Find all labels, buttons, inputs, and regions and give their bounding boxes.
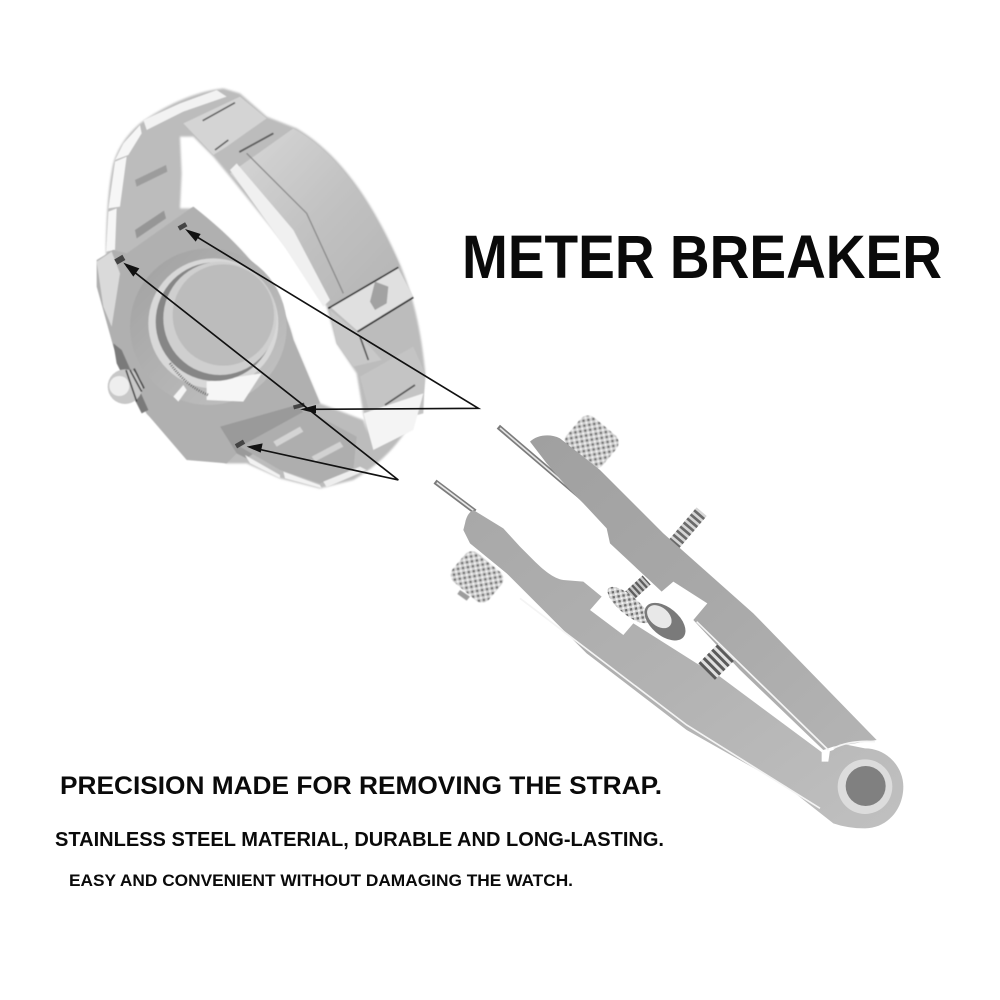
callout arrows	[123, 229, 478, 480]
lower knob	[447, 547, 507, 607]
upper arm	[530, 435, 877, 750]
feature line 2: STAINLESS STEEL MATERIAL, DURABLE AND LONG-LASTING.	[55, 829, 664, 851]
lug holes	[114, 222, 305, 448]
arm highlights	[520, 598, 875, 808]
title: METER BREAKER	[462, 223, 942, 291]
lower bracelet links	[240, 410, 357, 483]
watch case	[97, 207, 367, 488]
bracelet hole	[180, 137, 368, 433]
upper screw	[674, 512, 702, 544]
spring	[707, 652, 727, 672]
spring bar tool	[435, 411, 903, 828]
centre screw and wheel	[602, 580, 692, 648]
bracelet silhouette	[106, 88, 425, 488]
slit	[822, 750, 830, 762]
case back	[130, 248, 287, 405]
feature line 1: PRECISION MADE FOR REMOVING THE STRAP.	[60, 772, 662, 800]
spring bar pins	[435, 427, 602, 515]
pivot hole	[838, 759, 892, 814]
lower arm	[463, 510, 903, 828]
upper knob	[561, 411, 623, 473]
crown	[108, 343, 148, 413]
feature line 3: EASY AND CONVENIENT WITHOUT DAMAGING THE WATCH.	[69, 872, 573, 890]
watch illustration	[97, 88, 478, 488]
clasp cover	[230, 128, 425, 450]
left bracelet links	[106, 90, 273, 252]
